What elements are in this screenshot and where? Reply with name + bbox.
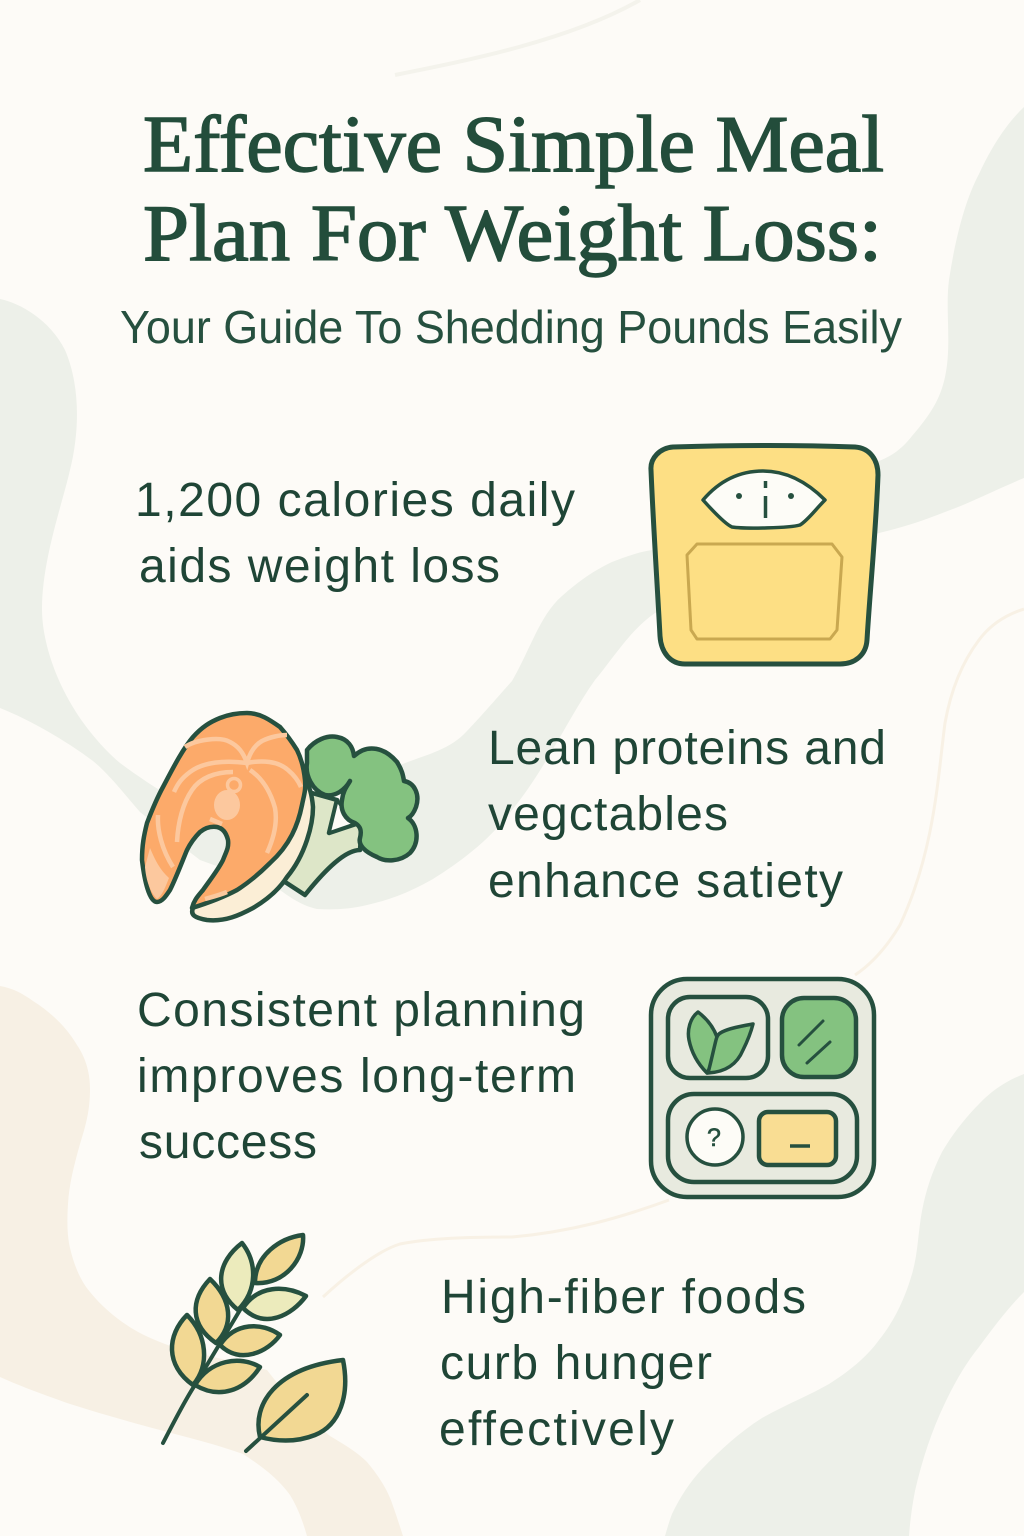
text: calories: 1,200 calories daily (135, 474, 575, 527)
text: calories: aids weight loss (139, 540, 500, 593)
text: lean proteins (488, 722, 886, 908)
salmon steak (142, 713, 305, 908)
text: high fiber (439, 1271, 806, 1456)
icon: bathroom scale (651, 446, 878, 664)
icon: wheat stalk and leaf (163, 1235, 345, 1451)
circle with question mark (687, 1109, 743, 1165)
text: lean proteins: Lean proteins and (488, 722, 886, 775)
text: high fiber: High-fiber foods (441, 1271, 806, 1324)
broccoli florets (307, 737, 417, 860)
icon: meal prep tray (651, 979, 874, 1197)
text: consistent planning: improves long-term (137, 1050, 576, 1103)
text: high fiber: effectively (439, 1403, 674, 1456)
text: calories (135, 474, 575, 593)
salmon marbling (158, 735, 301, 899)
icon: meal prep tray: ? (707, 1124, 721, 1152)
text: high fiber: curb hunger (440, 1337, 712, 1390)
title (143, 101, 884, 278)
text: consistent planning (137, 984, 585, 1169)
text: consistent planning: Consistent planning (137, 984, 585, 1037)
text: lean proteins: vegctables (488, 788, 728, 841)
text: consistent planning: success (139, 1116, 317, 1169)
salmon skin (192, 780, 313, 920)
leaves (688, 1012, 717, 1073)
text: lean proteins: enhance satiety (488, 855, 843, 908)
title: Effective Simple Meal (143, 101, 884, 189)
subtitle: Your Guide To Shedding Pounds Easily (120, 301, 902, 353)
broccoli stalk (282, 793, 362, 895)
icon: salmon and broccoli (142, 713, 417, 920)
title: Plan For Weight Loss: (143, 190, 882, 278)
